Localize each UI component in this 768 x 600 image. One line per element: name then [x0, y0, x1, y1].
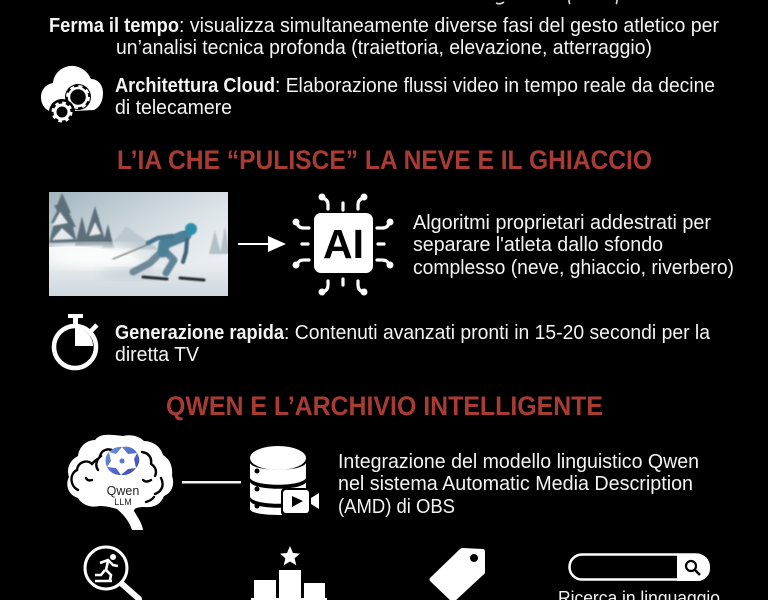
image: skier on snow [49, 192, 230, 296]
icon: cloud with gears [41, 66, 103, 125]
icon: magnifier with athlete [85, 547, 139, 599]
text block: architettura cloud [115, 75, 715, 119]
text block: algoritmi [413, 212, 734, 279]
text block: ferma il tempo: un’analisi tecnica profonda (traiettoria, elevazione, atterraggio) [116, 37, 652, 59]
text block: architettura cloud: Architettura Cloud [115, 75, 275, 97]
text block: generazione rapida: diretta TV [115, 344, 200, 366]
cut-off text remnant [496, 0, 617, 4]
text block: generazione rapida: : Contenuti avanzati pronti in 15-20 secondi per la [284, 322, 711, 344]
text block: ferma il tempo [49, 15, 719, 59]
heading: pulisce: L’IA CHE “PULISCE” LA NEVE E IL GHIACCIO [117, 145, 652, 175]
icon: search bar [570, 554, 710, 581]
text block: algoritmi: complesso (neve, ghiaccio, riverbero) [413, 257, 734, 279]
text block: ferma il tempo: : visualizza simultaneamente diverse fasi del gesto atletico per [179, 15, 719, 37]
icon: AI chip: AI [323, 221, 364, 267]
text block: generazione rapida: Generazione rapida [115, 322, 285, 344]
icon: AI chip [292, 194, 394, 296]
text block: generazione rapida [115, 322, 711, 366]
icon: stopwatch [54, 314, 97, 368]
icon: podium with star [251, 546, 327, 600]
text block: algoritmi: Algoritmi proprietari addestrati per [413, 212, 711, 234]
text block: ferma il tempo: Ferma il tempo [49, 15, 179, 37]
text block: architettura cloud: di telecamere [115, 97, 232, 119]
text block: integrazione [338, 451, 699, 518]
text block: integrazione: nel sistema Automatic Media Description [338, 473, 693, 495]
icon: brain with Qwen logo: LLM [114, 497, 132, 507]
icon: tag [430, 548, 485, 600]
text block: integrazione: (AMD) di OBS [338, 496, 455, 518]
heading: qwen: QWEN E L’ARCHIVIO INTELLIGENTE [166, 391, 603, 421]
icon: brain with Qwen logo [67, 435, 173, 530]
icon: database with video camera [250, 446, 319, 516]
text block: architettura cloud: : Elaborazione flussi video in tempo reale da decine [275, 75, 715, 97]
arrow [238, 236, 286, 252]
connector line [182, 481, 241, 484]
text block: algoritmi: separare l'atleta dallo sfondo [413, 234, 663, 256]
icon: brain with Qwen logo: Qwen [107, 484, 139, 498]
text block: integrazione: Integrazione del modello linguistico Qwen [338, 451, 699, 473]
